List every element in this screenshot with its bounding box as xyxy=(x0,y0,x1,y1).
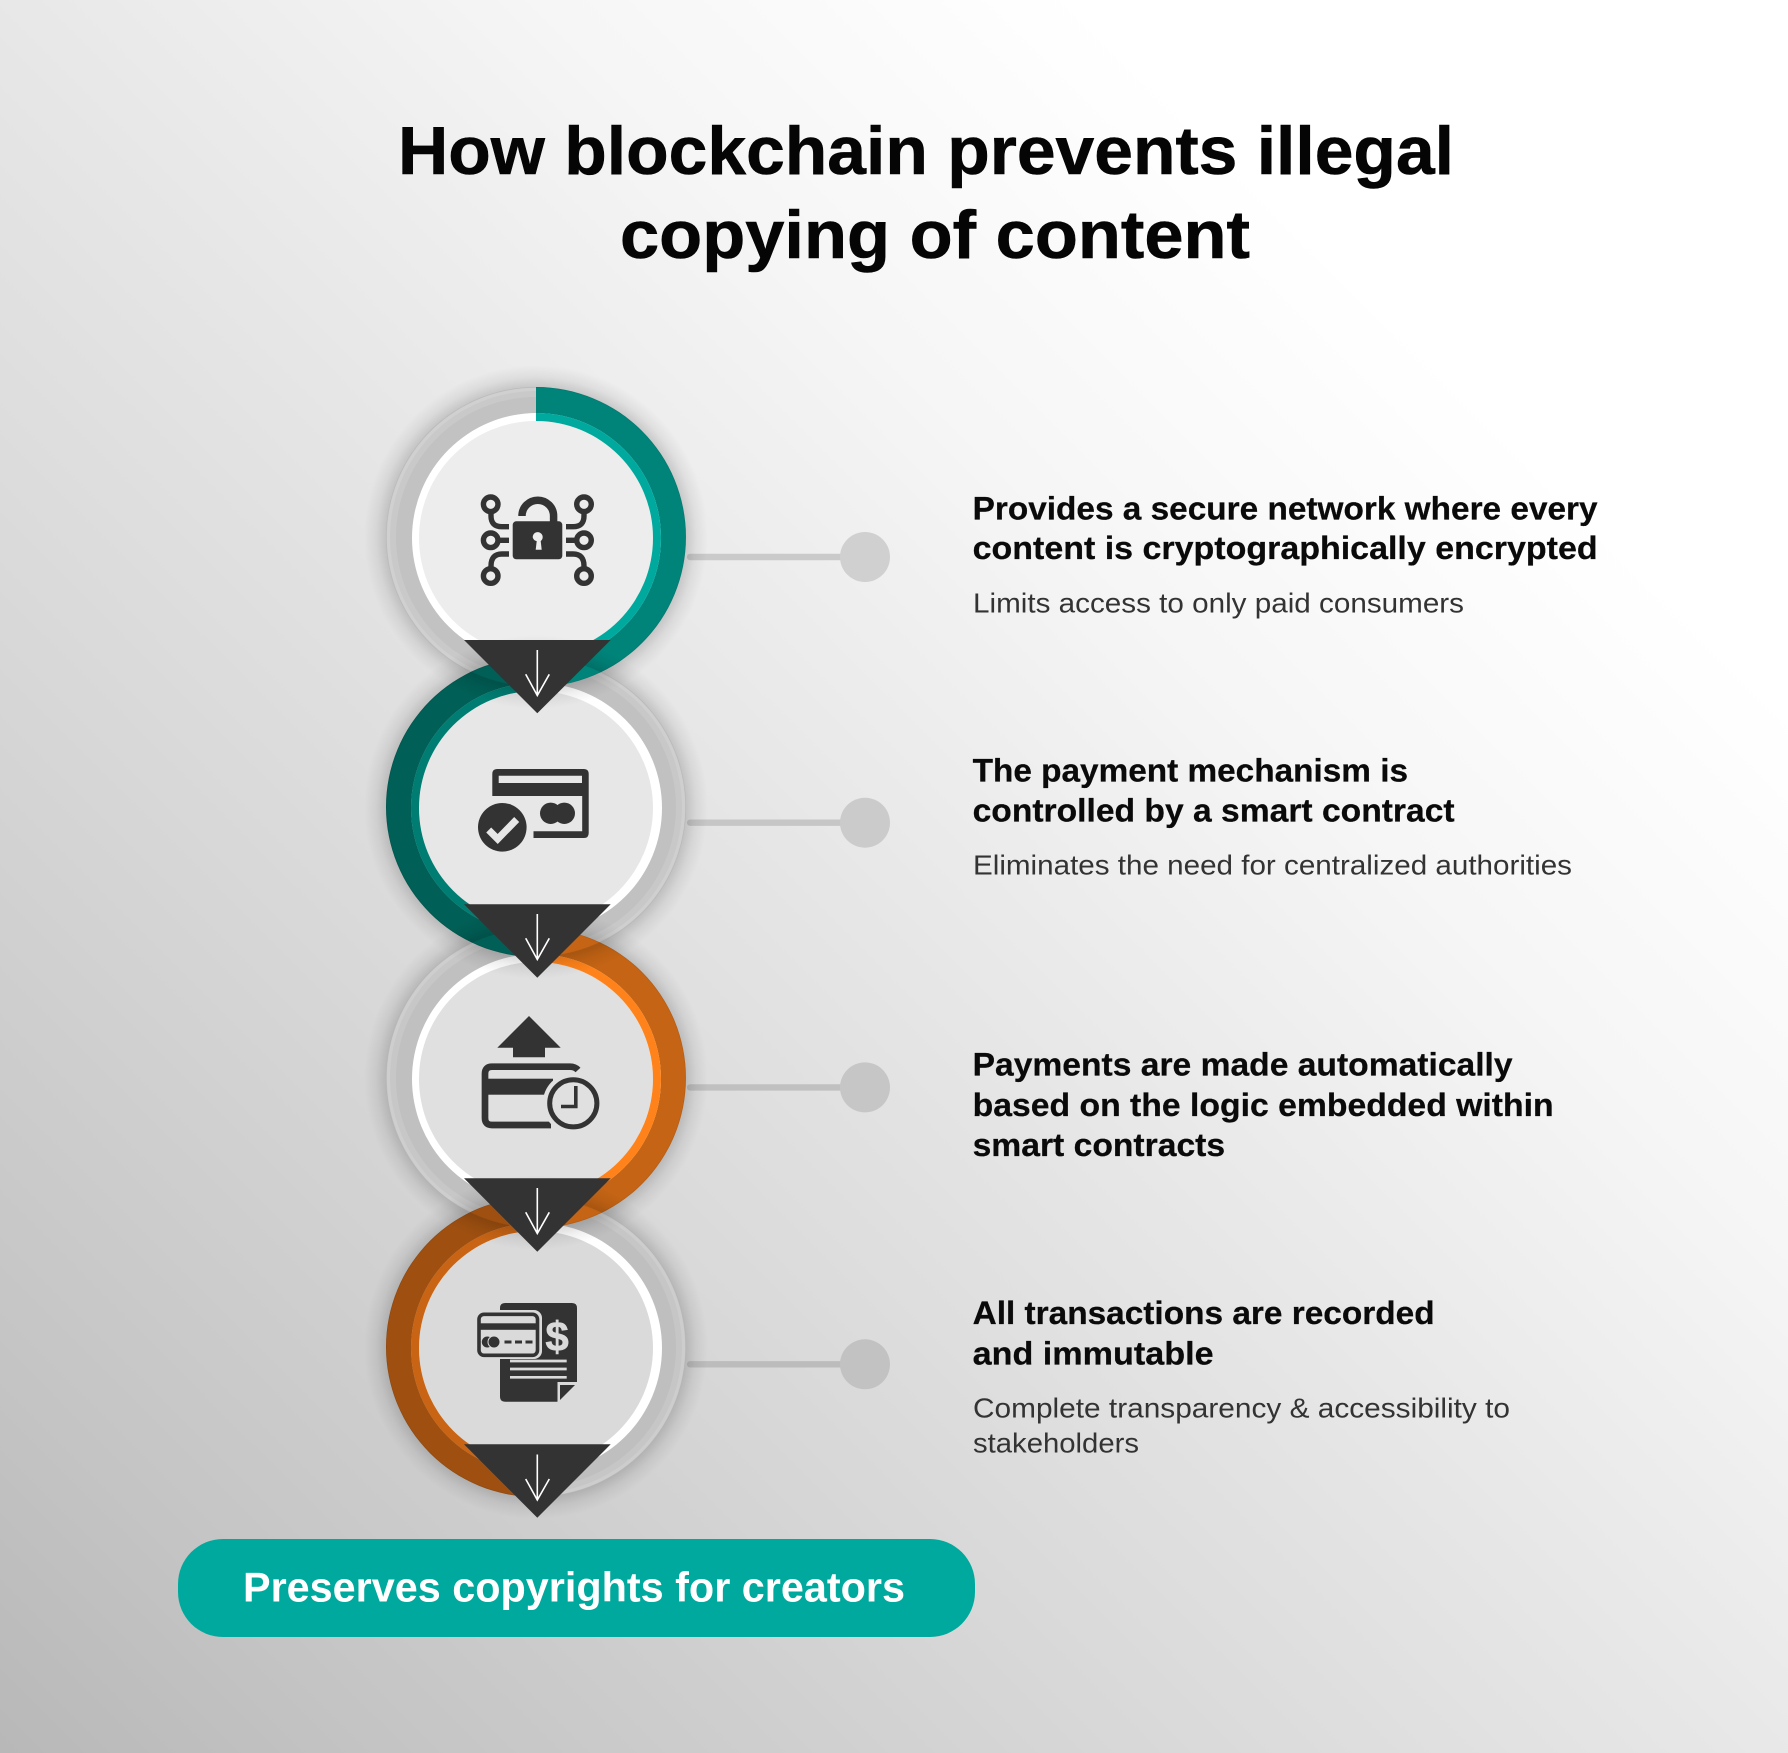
text block 1: content is cryptographically encrypted xyxy=(973,530,1598,566)
text block 4 xyxy=(973,1295,1510,1459)
text block 3: Payments are made automatically xyxy=(973,1047,1513,1083)
circle base: gray rings, white rings and inner fills xyxy=(386,387,686,1497)
downward arrow 4 xyxy=(464,1444,611,1518)
text block 4: stakeholders xyxy=(973,1428,1139,1459)
icon: invoice with credit card and dollar sign: $ xyxy=(545,1313,569,1360)
downward arrow 1 xyxy=(464,640,611,713)
text block 4: All transactions are recorded xyxy=(973,1295,1435,1331)
text block 3: based on the logic embedded within xyxy=(973,1087,1554,1123)
text block 3 xyxy=(973,1047,1554,1163)
icon: scheduled card payment with upload arrow and clock xyxy=(485,1016,604,1134)
icon: encrypted padlock network xyxy=(483,497,591,583)
text block 2: Eliminates the need for centralized authorities xyxy=(973,849,1572,880)
text block 1 xyxy=(973,490,1598,619)
text block 1: Limits access to only paid consumers xyxy=(973,588,1464,619)
downward arrow 2 xyxy=(464,904,611,978)
conclusion pill xyxy=(178,1539,975,1637)
icon: credit card with check mark xyxy=(478,769,589,852)
text block 2 xyxy=(973,753,1572,880)
text block 4: Complete transparency & accessibility to xyxy=(973,1392,1510,1423)
coloured half ring: circle 3 orange xyxy=(536,928,686,1228)
text block 4: and immutable xyxy=(973,1335,1214,1371)
icon: invoice with credit card and dollar sign xyxy=(475,1303,578,1402)
coloured half ring: circle 4 dark orange xyxy=(386,1197,536,1497)
connector lines and dots xyxy=(687,532,890,1389)
conclusion pill: Preserves copyrights for creators xyxy=(243,1564,905,1611)
text block 1: Provides a secure network where every xyxy=(973,490,1598,526)
text block 3: smart contracts xyxy=(973,1127,1225,1163)
title: copying of content xyxy=(620,197,1250,273)
text block 2: controlled by a smart contract xyxy=(973,792,1455,828)
coloured half ring: circle 2 dark teal xyxy=(386,657,536,957)
downward arrow 3 xyxy=(464,1178,611,1252)
title xyxy=(398,113,1454,273)
text block 2: The payment mechanism is xyxy=(973,753,1408,789)
title: How blockchain prevents illegal xyxy=(398,113,1454,189)
soft shadows around circles xyxy=(364,365,708,1519)
coloured half ring: circle 1 teal xyxy=(536,387,686,687)
